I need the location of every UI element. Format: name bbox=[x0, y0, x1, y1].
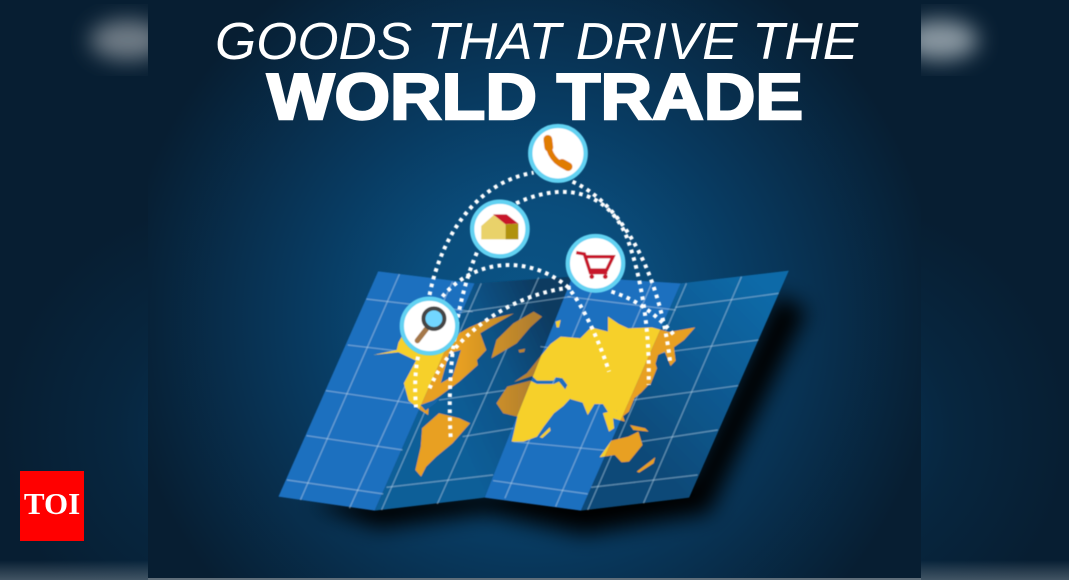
route: cart to north america bbox=[429, 288, 571, 390]
continents: yellow on lit panels bbox=[373, 316, 661, 458]
map panel 4 bbox=[581, 271, 789, 511]
left blurred background panel bbox=[0, 6, 148, 580]
right blurred background panel bbox=[921, 6, 1069, 580]
map shadow bbox=[311, 293, 807, 535]
folded map bbox=[278, 271, 789, 511]
map grid lines bbox=[287, 274, 779, 510]
title line 2: WORLD TRADE bbox=[267, 60, 803, 133]
map panel 3 bbox=[485, 277, 681, 511]
route: magnifier to phone to east asia bbox=[430, 173, 671, 365]
route: magnifier arc to asia bbox=[442, 265, 609, 372]
TOI logo: TOI bbox=[24, 486, 80, 521]
icon: warehouse bbox=[472, 202, 528, 256]
central background panel bbox=[148, 0, 921, 580]
icon: phone bbox=[530, 126, 586, 181]
continents: orange on panel 4 bbox=[604, 326, 696, 474]
icon: shopping cart bbox=[568, 236, 623, 291]
continents: shaded on panel 2 bbox=[414, 310, 543, 478]
icon: magnifying glass bbox=[402, 299, 457, 353]
route: cart to east bbox=[611, 292, 674, 335]
TOI logo bbox=[20, 471, 84, 541]
illustration: folded world map with icons bbox=[278, 126, 807, 535]
map panel 2 bbox=[375, 277, 573, 511]
title bbox=[215, 13, 859, 133]
inland seas bbox=[420, 350, 461, 411]
title line 1: GOODS THAT DRIVE THE bbox=[215, 13, 859, 71]
dotted trade routes bbox=[415, 173, 674, 440]
route: house arc to east asia bbox=[516, 192, 649, 385]
map panel 1 bbox=[278, 271, 474, 511]
route: magnifier to north america bbox=[415, 357, 418, 407]
route: house to south america bbox=[450, 253, 477, 440]
